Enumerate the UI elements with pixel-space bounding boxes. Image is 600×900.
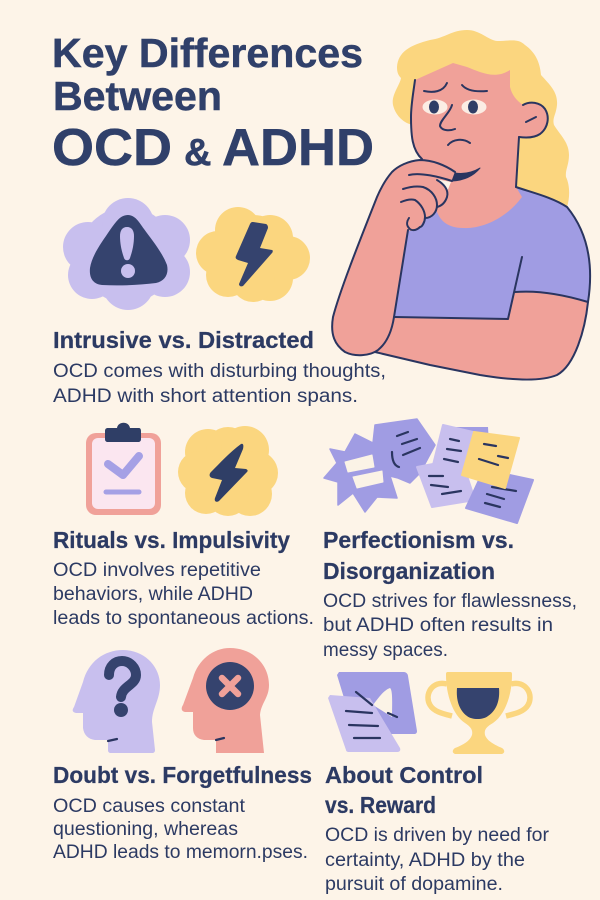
text: about control vs reward: About Control [325,762,483,788]
text: intrusive vs distracted [53,327,386,407]
text: rituals vs impulsivity: behaviors, while ADHD [53,584,253,605]
text: about control vs reward: vs. Reward [325,792,436,818]
text: rituals vs impulsivity: OCD involves repetitive [53,560,261,581]
ear [519,103,548,138]
text: about control vs reward: OCD is driven by need for [325,825,550,846]
icon: lightning cloud [196,207,310,302]
icon: clipboard [86,423,161,515]
text: rituals vs impulsivity [53,527,314,629]
text: intrusive vs distracted: OCD comes with disturbing thoughts, [53,361,386,382]
title: Between [53,73,222,119]
icon: lightning cloud 2 [178,426,278,516]
text: doubt vs forgetfulness: questioning, whereas [53,819,238,840]
text: intrusive vs distracted: Intrusive vs. Distracted [53,327,314,353]
text: rituals vs impulsivity: leads to spontaneous actions. [53,608,314,629]
text: doubt vs forgetfulness: Doubt vs. Forgetfulness [53,762,312,788]
text: intrusive vs distracted: ADHD with short attention spans. [53,386,358,407]
text: perfectionism vs disorganization: Disorganization [323,558,495,584]
title: OCD [52,119,172,177]
forearm and hand [332,160,455,355]
text: about control vs reward: pursuit of dopamine. [325,874,503,895]
text: about control vs reward: certainty, ADHD by the [325,850,525,871]
icon: head with x [182,648,269,753]
eyes [422,100,486,114]
text: rituals vs impulsivity: Rituals vs. Impulsivity [53,527,290,553]
lower arm [375,292,588,380]
title: & [184,132,211,174]
text: about control vs reward [325,762,550,895]
title: ADHD [222,119,374,177]
nail [436,179,451,192]
text: perfectionism vs disorganization [323,527,577,661]
text: perfectionism vs disorganization: but ADHD often results in [323,615,553,636]
icon: papers [328,672,417,752]
title [52,30,374,177]
hair [393,30,569,207]
outlines [332,80,590,380]
icon: scattered papers [324,419,533,523]
text: doubt vs forgetfulness: ADHD leads to memorn.pses. [53,842,308,863]
text: perfectionism vs disorganization: messy spaces. [323,640,448,661]
illustration: worried woman [332,30,590,380]
text: perfectionism vs disorganization: Perfectionism vs. [323,527,514,553]
icon: head with question mark [73,650,160,753]
neck and face [411,63,545,228]
title: Key Differences [52,30,363,76]
text: doubt vs forgetfulness: OCD causes constant [53,796,246,817]
shirt [394,187,590,319]
icon: warning cloud [63,198,190,310]
icon: trophy [428,672,530,754]
chin shadow [452,168,480,181]
text: doubt vs forgetfulness [53,762,312,863]
text: perfectionism vs disorganization: OCD strives for flawlessness, [323,591,577,612]
